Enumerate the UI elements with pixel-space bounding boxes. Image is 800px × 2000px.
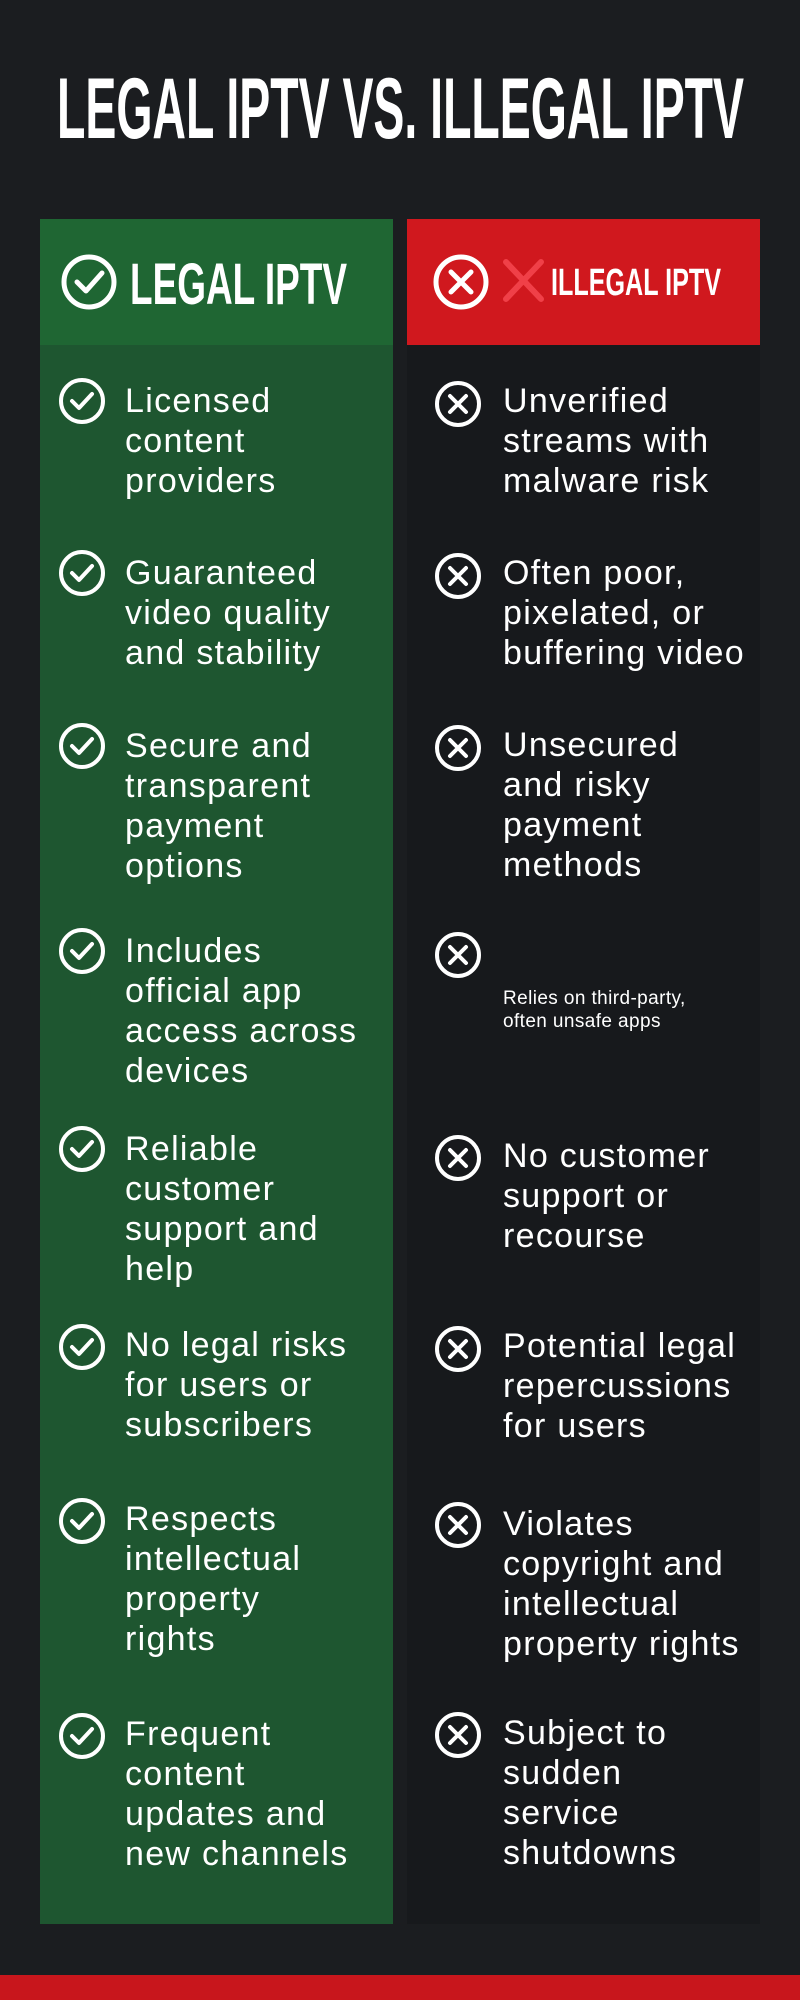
legal item 7: rights xyxy=(125,1620,216,1658)
legal item 2: Guaranteed xyxy=(125,554,318,592)
illegal item 5: No customer xyxy=(503,1137,710,1175)
legal item 7 xyxy=(59,1498,301,1658)
illegal item 6: Potential legal xyxy=(503,1327,736,1365)
illegal item 1: malware risk xyxy=(503,462,709,500)
illegal item 2: pixelated, or xyxy=(503,594,705,632)
illegal item 1: streams with xyxy=(503,422,709,460)
illegal item 5: recourse xyxy=(503,1217,646,1255)
legal item 5: help xyxy=(125,1250,194,1288)
legal item 2: video quality xyxy=(125,594,331,632)
illegal item 7: copyright and xyxy=(503,1545,724,1583)
illegal item 8: service xyxy=(503,1794,620,1832)
legal item 4: official app xyxy=(125,972,303,1010)
illegal item 7 xyxy=(435,1502,740,1663)
illegal item 4: often unsafe apps xyxy=(503,1011,661,1032)
illegal item 1 xyxy=(435,381,709,500)
legal item 1: providers xyxy=(125,462,277,500)
legal item 8: content xyxy=(125,1755,246,1793)
legal item 4 xyxy=(59,928,357,1090)
illegal item 2: buffering video xyxy=(503,634,745,672)
legal item 3: payment xyxy=(125,807,265,845)
header: illegal xyxy=(407,219,760,345)
legal item 5 xyxy=(59,1126,319,1288)
illegal item 7: Violates xyxy=(503,1505,634,1543)
legal item 3: Secure and xyxy=(125,727,312,765)
illegal item 5 xyxy=(435,1135,710,1255)
legal item 2 xyxy=(59,550,331,672)
legal item 4: Includes xyxy=(125,932,262,970)
legal item 3 xyxy=(59,723,312,885)
legal item 3: transparent xyxy=(125,767,311,805)
legal item 5: Reliable xyxy=(125,1130,258,1168)
legal item 5: customer xyxy=(125,1170,275,1208)
illegal item 7: property rights xyxy=(503,1625,740,1663)
legal item 2: and stability xyxy=(125,634,321,672)
illegal item 7: intellectual xyxy=(503,1585,679,1623)
legal item 8: Frequent xyxy=(125,1715,271,1753)
legal item 6 xyxy=(59,1324,347,1444)
illegal item 2: Often poor, xyxy=(503,554,686,592)
legal item 7: Respects xyxy=(125,1500,277,1538)
legal item 6: No legal risks xyxy=(125,1326,347,1364)
illegal item 5: support or xyxy=(503,1177,669,1215)
panel: illegal xyxy=(407,219,760,1924)
legal item 8: new channels xyxy=(125,1835,349,1873)
panel: legal xyxy=(40,219,393,1924)
legal item 1: Licensed xyxy=(125,382,272,420)
legal item 7: property xyxy=(125,1580,260,1618)
legal item 5: support and xyxy=(125,1210,319,1248)
illegal item 8: Subject to xyxy=(503,1714,667,1752)
illegal item 6 xyxy=(435,1326,736,1445)
legal item 1: content xyxy=(125,422,246,460)
legal item 6: for users or xyxy=(125,1366,313,1404)
illegal item 8 xyxy=(435,1712,677,1872)
illegal item 6: for users xyxy=(503,1407,647,1445)
footer strip xyxy=(0,1975,800,2000)
illegal item 3: methods xyxy=(503,846,643,884)
illegal item 2 xyxy=(435,553,745,672)
illegal item 4 xyxy=(435,932,686,1032)
header: legal xyxy=(40,219,393,345)
illegal item 8: sudden xyxy=(503,1754,622,1792)
legal item 4: devices xyxy=(125,1052,249,1090)
legal item 6: subscribers xyxy=(125,1406,313,1444)
illegal item 8: shutdowns xyxy=(503,1834,677,1872)
illegal item 3: payment xyxy=(503,806,643,844)
illegal item 3: and risky xyxy=(503,766,651,804)
illegal item 4: Relies on third-party, xyxy=(503,988,686,1009)
legal item 8: updates and xyxy=(125,1795,326,1833)
legal item 8 xyxy=(59,1713,349,1873)
legal item 3: options xyxy=(125,847,244,885)
legal item 1 xyxy=(59,378,277,500)
legal item 7: intellectual xyxy=(125,1540,301,1578)
legal item 4: access across xyxy=(125,1012,357,1050)
illegal item 1: Unverified xyxy=(503,382,669,420)
illegal item 3: Unsecured xyxy=(503,726,679,764)
illegal item 3 xyxy=(435,725,679,884)
illegal item 6: repercussions xyxy=(503,1367,732,1405)
